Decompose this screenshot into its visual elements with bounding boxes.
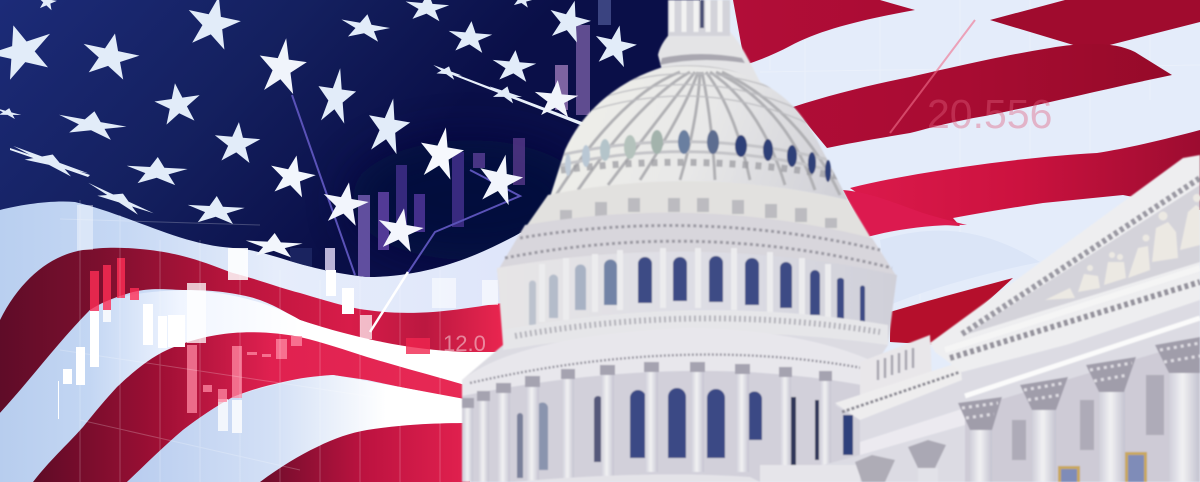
pediment statues: [1045, 194, 1200, 300]
drum silhouette backing: [462, 268, 897, 482]
right flag pale field: [700, 0, 1200, 482]
senate wing balustrade: [860, 335, 932, 398]
faded market figure: 12.0: 12.0: [443, 331, 486, 356]
dome lantern: [658, 0, 760, 82]
senate pediment: [930, 155, 1200, 405]
capitol building: [462, 0, 1200, 482]
wing wall and stairs: [760, 280, 1200, 482]
flag canton with stars: [0, 0, 700, 277]
right flag stripes: [733, 0, 1200, 345]
star field: [0, 0, 640, 258]
dome body: [540, 64, 848, 200]
drum cornice: [497, 213, 897, 277]
trend line: [890, 20, 975, 133]
faded market figure: 20.556: 20.556: [927, 91, 1052, 137]
balustrade: [503, 310, 888, 350]
drum attic: [525, 181, 872, 240]
lower entablature: [462, 328, 870, 402]
left flag stripes: [0, 248, 510, 482]
senate recess behind columns: [965, 340, 1200, 482]
senate columns: [958, 337, 1200, 482]
drum wall with windows: [497, 248, 897, 340]
lower colonnade: [462, 355, 862, 482]
